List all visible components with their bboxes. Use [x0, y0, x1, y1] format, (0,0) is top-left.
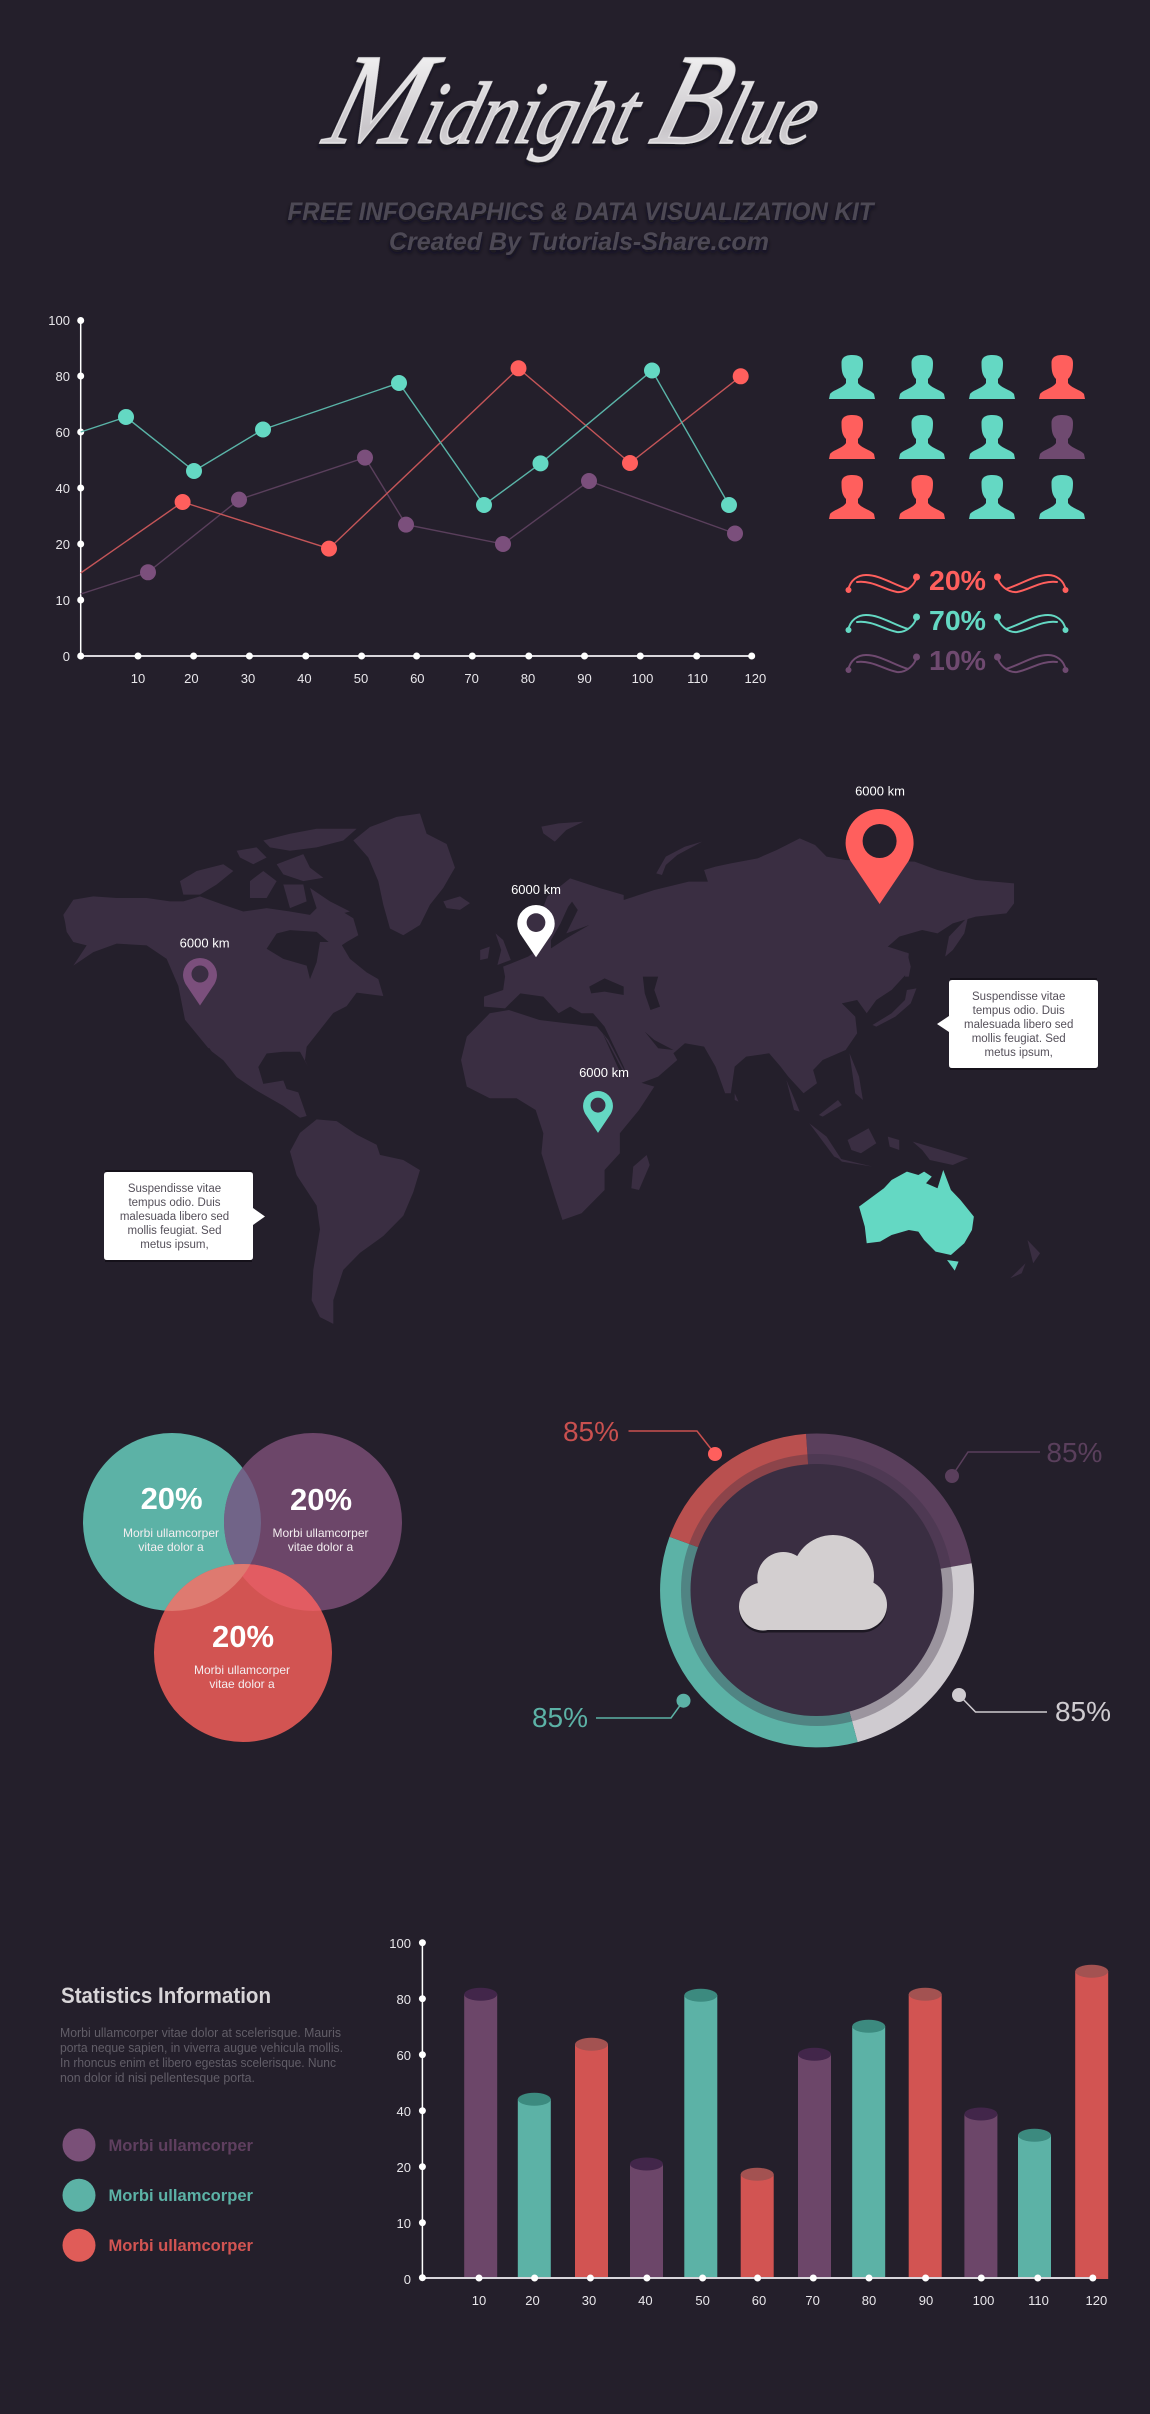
line chart axes: [81, 320, 752, 656]
venn labels: vitae dolor a: [209, 1677, 275, 1691]
legend item: teal: [62, 2179, 253, 2212]
red series: [81, 360, 749, 573]
callout: left: malesuada libero sed: [120, 1211, 229, 1223]
y axis labels: 80: [56, 369, 70, 384]
bars: [464, 1965, 1108, 2279]
callout: left: [104, 1170, 265, 1262]
x axis labels: 60: [410, 671, 425, 686]
bar x axis labels: 110: [1028, 2293, 1049, 2308]
callout: left: Suspendisse vitae: [128, 1183, 221, 1195]
bar x axis labels: 80: [862, 2293, 876, 2308]
20 percent row: [846, 565, 1068, 596]
bar x axis labels: 40: [638, 2293, 653, 2308]
callout: right: Suspendisse vitae: [972, 991, 1065, 1003]
y axis labels: 60: [56, 425, 70, 440]
x axis labels: 80: [521, 671, 535, 686]
purple map pin: 6000 km: [180, 936, 230, 950]
person row 1: [829, 355, 1085, 399]
teal series: [81, 362, 737, 513]
line chart: [48, 313, 766, 686]
y axis labels: 100: [48, 313, 70, 328]
legend item: purple: Morbi ullamcorper: [108, 2136, 253, 2155]
20 percent row: 20%: [929, 565, 986, 596]
y axis labels: 40: [56, 481, 70, 496]
statistics paragraph: porta neque sapien, in viverra augue vehicula mollis.: [60, 2040, 343, 2055]
subtitle: FREE INFOGRAPHICS & DATA VISUALIZATION KIT: [288, 198, 876, 226]
statistics heading: Statistics Information: [61, 1983, 271, 2008]
callout: teal 85 percent: [532, 1694, 690, 1733]
bar y axis labels: 10: [397, 2216, 411, 2231]
callout: red 85 percent: [563, 1416, 722, 1461]
percentage legend: [846, 565, 1068, 676]
bar y axis labels: 80: [397, 1992, 411, 2007]
venn labels: vitae dolor a: [288, 1540, 354, 1554]
donut center disc: [690, 1464, 942, 1716]
legend item: teal: Morbi ullamcorper: [108, 2186, 253, 2205]
world map: [63, 814, 1040, 1324]
x axis labels: 70: [464, 671, 479, 686]
title: Midnight Blue: [311, 27, 844, 171]
donut inner shade ring: [681, 1454, 953, 1726]
teal map pin: [579, 1065, 629, 1133]
person row 2: [829, 415, 1085, 459]
y axis labels: 20: [56, 537, 70, 552]
bar x axis labels: 50: [695, 2293, 710, 2308]
x axis labels: 30: [241, 671, 255, 686]
y axis labels: 10: [56, 593, 70, 608]
bar x axis labels: [472, 2293, 1107, 2308]
statistics paragraph: [60, 2025, 343, 2085]
callout: right: tempus odio. Duis: [973, 1005, 1065, 1017]
venn labels: Morbi ullamcorper: [123, 1526, 219, 1540]
x axis labels: 10: [131, 671, 145, 686]
callout: light 85 percent: [952, 1688, 1111, 1727]
africa eurasia and islands: [461, 822, 1040, 1278]
x axis labels: 100: [632, 671, 653, 686]
callout: right: mollis feugiat. Sed: [972, 1033, 1066, 1045]
legend: [62, 2128, 253, 2262]
bar x axis labels: 120: [1086, 2293, 1107, 2308]
y axis labels: [48, 313, 70, 664]
bar x axis labels: 100: [973, 2293, 994, 2308]
statistics paragraph: non dolor id nisi pellentesque porta.: [60, 2070, 255, 2085]
callout: right: metus ipsum,: [985, 1047, 1053, 1059]
red map pin: [846, 784, 914, 904]
red teal overlap: [164, 1564, 250, 1611]
red purple overlap: [234, 1564, 322, 1611]
x axis labels: 110: [687, 671, 708, 686]
americas and greenland: [63, 814, 470, 1324]
venn labels: 20%: [141, 1481, 203, 1516]
x axis labels: [131, 671, 766, 686]
legend item: red: [62, 2229, 253, 2262]
teal map pin: 6000 km: [579, 1065, 629, 1080]
subtitle: Created By Tutorials-Share.com: [389, 228, 769, 256]
statistics paragraph: In rhoncus enim et libero egestas scelerisque. Nunc: [60, 2055, 336, 2070]
inland seas: [551, 902, 673, 1080]
callout: right: malesuada libero sed: [964, 1019, 1073, 1031]
teal purple overlap: [224, 1468, 261, 1564]
callout: teal 85 percent: 85%: [532, 1702, 588, 1733]
bar x axis labels: 30: [582, 2293, 596, 2308]
purple circle: [224, 1433, 402, 1611]
70 percent row: 70%: [929, 605, 986, 636]
bar y axis labels: [389, 1936, 411, 2287]
x axis labels: 50: [354, 671, 368, 686]
icon: cloud: [739, 1535, 887, 1633]
legend item: red: Morbi ullamcorper: [108, 2236, 253, 2255]
venn labels: [123, 1481, 369, 1691]
bar x axis labels: 90: [919, 2293, 933, 2308]
venn labels: 20%: [290, 1482, 352, 1517]
purple map pin: [180, 936, 230, 1006]
callout: red 85 percent: 85%: [563, 1416, 619, 1447]
y axis labels: 0: [63, 649, 70, 664]
x axis labels: 20: [184, 671, 199, 686]
australia: [859, 1170, 974, 1271]
venn labels: vitae dolor a: [138, 1540, 204, 1554]
70 percent row: [846, 605, 1068, 636]
10 percent row: 10%: [929, 645, 986, 676]
callout: purple 85 percent: 85%: [1046, 1437, 1102, 1468]
bar x axis labels: 70: [805, 2293, 820, 2308]
callout: left: metus ipsum,: [140, 1239, 209, 1251]
venn labels: Morbi ullamcorper: [272, 1526, 369, 1540]
white map pin: [511, 882, 561, 957]
red circle: [154, 1564, 332, 1742]
10 percent row: [846, 645, 1068, 676]
callout: purple 85 percent: [945, 1437, 1102, 1483]
venn labels: 20%: [212, 1619, 274, 1654]
person row 3: [829, 475, 1085, 519]
bar y axis labels: 40: [397, 2104, 411, 2119]
bar y axis labels: 100: [389, 1936, 411, 1951]
bar y axis labels: 0: [404, 2272, 411, 2287]
x axis labels: 40: [297, 671, 312, 686]
red map pin: 6000 km: [855, 784, 905, 798]
bar x axis labels: 60: [752, 2293, 766, 2308]
venn diagram: [83, 1433, 402, 1742]
bar chart: [389, 1936, 1108, 2308]
callout: light 85 percent: 85%: [1055, 1696, 1111, 1727]
bar chart axes: [422, 1943, 1093, 2278]
x axis labels: 120: [745, 671, 766, 686]
teal circle: [83, 1433, 261, 1611]
callout: right: [937, 978, 1098, 1070]
bar y axis labels: 20: [397, 2160, 411, 2175]
legend item: purple: [62, 2128, 253, 2162]
callout: left: tempus odio. Duis: [128, 1197, 221, 1209]
purple series: [81, 450, 743, 594]
bar y axis labels: 60: [397, 2048, 411, 2063]
subtitle: [288, 198, 876, 256]
bar x axis labels: 10: [472, 2293, 486, 2308]
white map pin: 6000 km: [511, 882, 561, 897]
line chart axis ticks: [77, 317, 755, 660]
statistics paragraph: Morbi ullamcorper vitae dolor at scelerisque. Mauris: [60, 2025, 341, 2040]
venn labels: Morbi ullamcorper: [194, 1663, 290, 1677]
bar chart ticks: [419, 1939, 1096, 2282]
callout: left: mollis feugiat. Sed: [128, 1225, 221, 1237]
donut chart: [532, 1416, 1111, 1747]
bar x axis labels: 20: [525, 2293, 540, 2308]
donut segments: [660, 1434, 974, 1747]
people icon grid: [829, 355, 1085, 519]
x axis labels: 90: [577, 671, 592, 686]
